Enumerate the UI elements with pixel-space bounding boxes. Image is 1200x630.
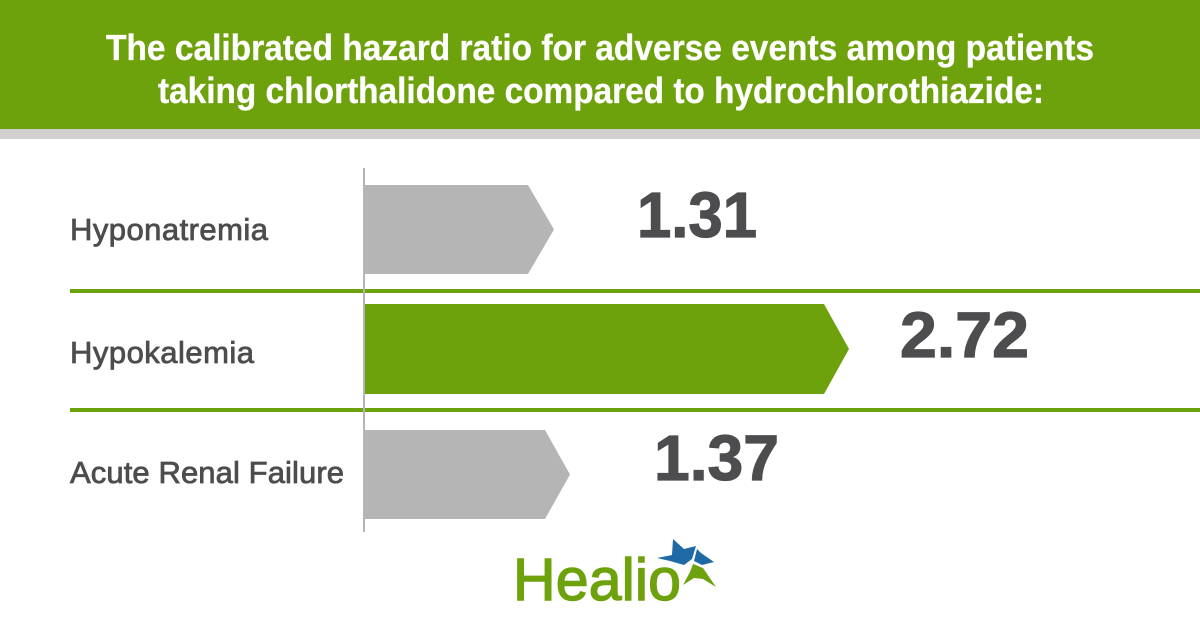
bar: Hyponatremia [364,185,554,274]
bar: Hypokalemia [365,304,849,394]
label: Acute Renal Failure: Acute Renal Failure [70,455,344,490]
label: Hypokalemia: Hypokalemia [70,335,255,370]
value: 1.31: 1.31 [637,179,757,251]
bar: Acute Renal Failure [364,430,570,519]
logo: Healio [513,539,716,613]
logo star icon [657,539,716,587]
row: Acute Renal Failure [70,422,779,519]
heading: taking chlorthalidone compared to hydrochlorothiazide: [158,70,1044,111]
row: Hyponatremia [70,179,757,274]
vertical axis [363,168,365,532]
divider lines [70,289,1200,412]
row: Hypokalemia [70,299,1029,394]
label: Hyponatremia: Hyponatremia [70,212,269,247]
value: 2.72: 2.72 [900,299,1029,371]
value: 1.37: 1.37 [654,422,779,494]
heading: The calibrated hazard ratio for adverse events among patients [106,27,1094,68]
header banner [0,0,1200,139]
logo wordmark: Healio [513,547,681,613]
heading [106,27,1094,111]
